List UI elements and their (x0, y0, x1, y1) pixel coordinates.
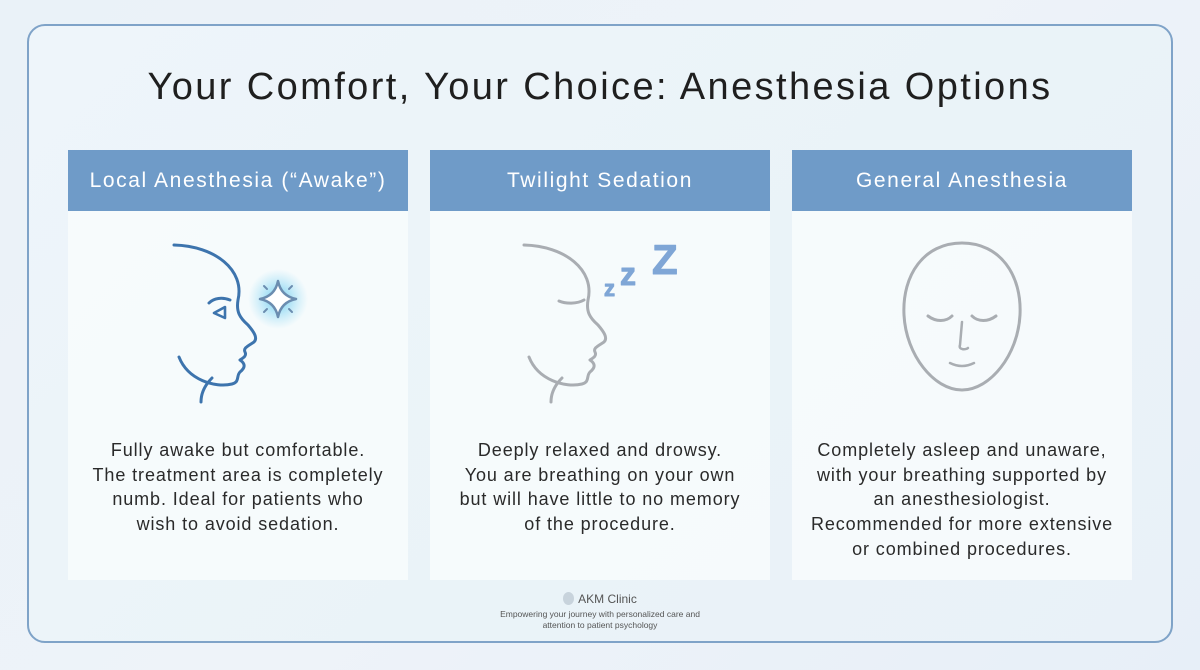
footer tagline (500, 609, 700, 630)
icon: sleeping profile (524, 245, 606, 402)
panel: local (68, 150, 408, 580)
icon: zzz (604, 236, 678, 301)
text: general: Completely asleep and unaware, (817, 440, 1107, 460)
text: local: The treatment area is completely (93, 465, 383, 485)
text: general: an anesthesiologist. (873, 489, 1051, 509)
header: general: General Anesthesia (856, 169, 1068, 192)
text: general: with your breathing supported by (817, 465, 1107, 485)
title: Your Comfort, Your Choice: Anesthesia Options (147, 66, 1053, 108)
text: local: Fully awake but comfortable. (111, 440, 365, 460)
icon: zzz: z (620, 256, 636, 292)
icon: awake profile (174, 245, 256, 402)
text: general (811, 440, 1113, 559)
text: local (92, 440, 383, 534)
header: twilight (430, 150, 770, 211)
panel: twilight (430, 150, 770, 580)
icon: sparkle (248, 269, 308, 329)
icon: zzz: z (604, 276, 615, 301)
header: general (792, 150, 1132, 211)
text: local: numb. Ideal for patients who (112, 489, 364, 509)
text: twilight (460, 440, 740, 534)
icon: front face (904, 243, 1020, 390)
text: twilight: but will have little to no memory (460, 489, 740, 509)
header: twilight: Twilight Sedation (507, 169, 693, 192)
panel: general (792, 150, 1132, 580)
text: general: or combined procedures. (852, 539, 1072, 559)
icon: zzz: Z (652, 236, 678, 283)
footer (500, 592, 700, 630)
text: local: wish to avoid sedation. (137, 514, 339, 534)
header: local: Local Anesthesia (“Awake”) (90, 169, 386, 192)
text: general: Recommended for more extensive (811, 514, 1113, 534)
footer tagline: Empowering your journey with personalized care and (500, 609, 700, 619)
footer logo: AKM Clinic (578, 592, 637, 606)
footer tagline: attention to patient psychology (543, 620, 657, 630)
text: twilight: Deeply relaxed and drowsy. (478, 440, 722, 460)
text: twilight: of the procedure. (524, 514, 676, 534)
text: twilight: You are breathing on your own (465, 465, 735, 485)
header: local (68, 150, 408, 211)
